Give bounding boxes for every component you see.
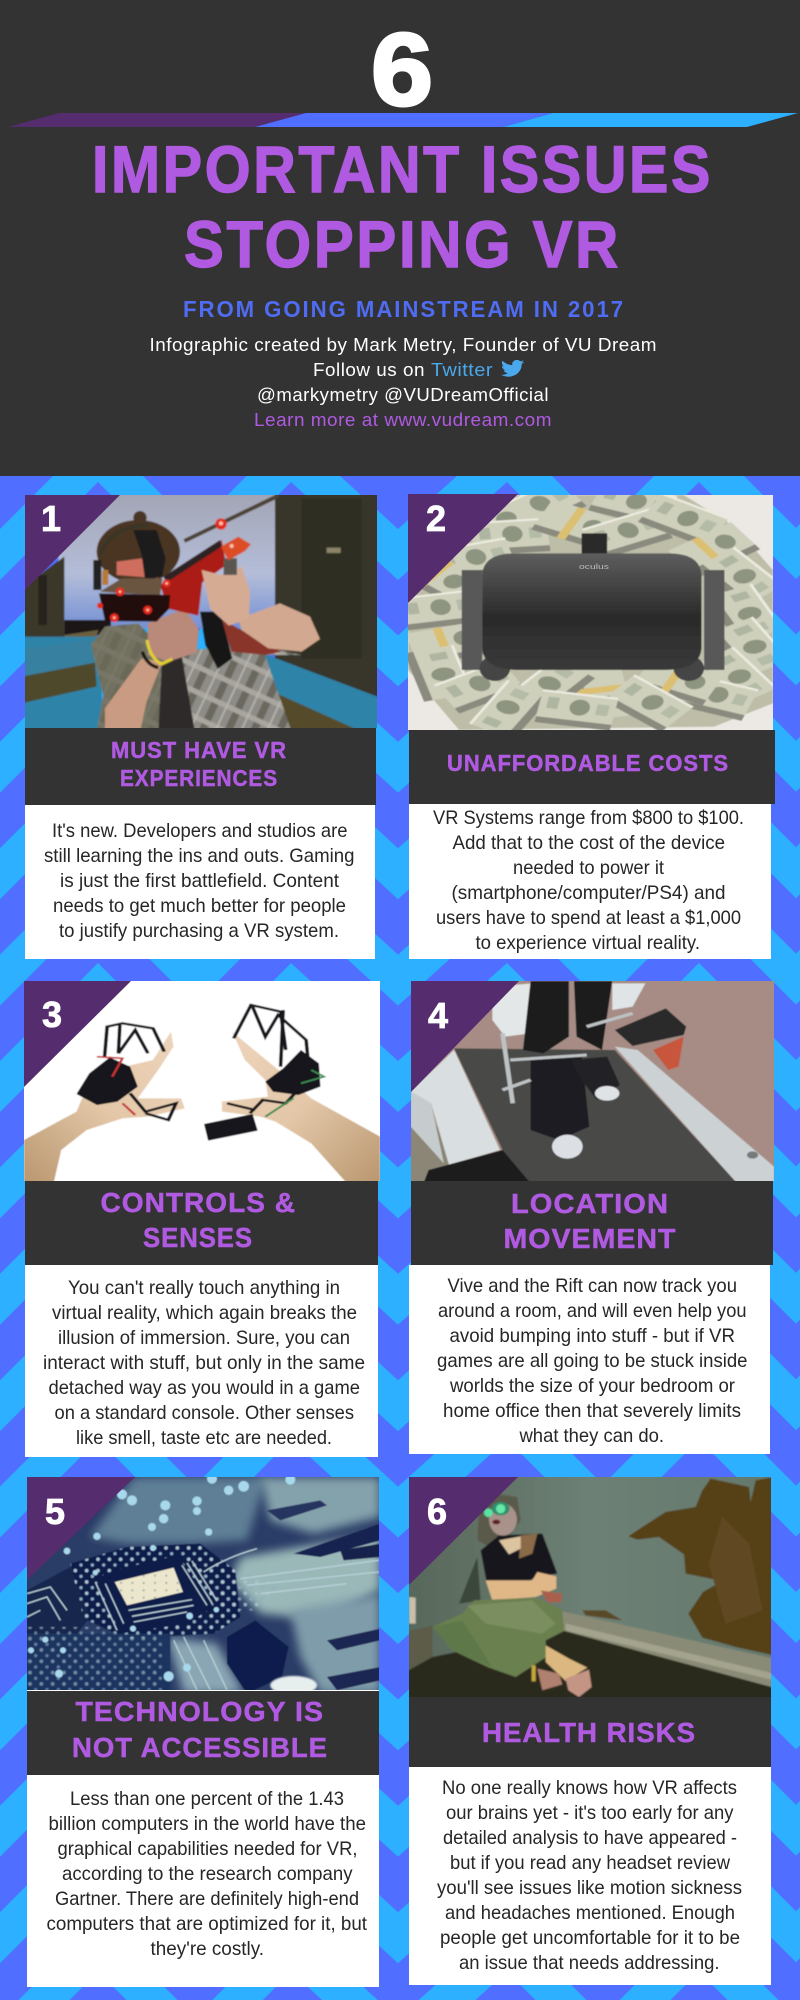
text block 5: Less than one percent of the 1.43 [70, 1788, 344, 1810]
heading band 2: UNAFFORDABLE COSTS [447, 750, 729, 776]
credits: Infographic created by Mark Metry, Founder of VU Dream [150, 334, 657, 355]
title: STOPPING VR [184, 207, 621, 281]
photo: player with VR gun [22, 492, 382, 733]
text block 1: still learning the ins and outs. Gaming [44, 845, 354, 867]
heading band 4 [411, 1181, 773, 1265]
title [92, 132, 713, 281]
text block 1 [25, 805, 375, 959]
text block 4 [409, 1265, 770, 1454]
text block 5 [27, 1775, 379, 1987]
heading band 1 [25, 728, 376, 805]
heading band 1: MUST HAVE VR [111, 737, 287, 763]
text block 3: virtual reality, which again breaks the [52, 1302, 357, 1324]
panel: issue 1 [22, 492, 382, 959]
heading band 3 [25, 1181, 378, 1265]
credits: Twitter [431, 359, 493, 380]
panel: issue 6 [406, 1474, 776, 1985]
text block 4: Vive and the Rift can now track you [448, 1275, 737, 1297]
number corner 5: 5 [45, 1491, 65, 1532]
panel: issue 5 [24, 1474, 384, 1987]
heading band 2 [409, 730, 775, 804]
number corner 3: 3 [42, 994, 62, 1035]
photo: hands in exoskeleton gloves [20, 977, 388, 1183]
text block 2: Add that to the cost of the device [452, 832, 725, 854]
text block 6: our brains yet - it's too early for any [446, 1802, 734, 1824]
heading band 6: HEALTH RISKS [482, 1717, 696, 1748]
text block 1: is just the first battlefield. Content [60, 870, 340, 892]
panel: issue 4 [408, 977, 781, 1454]
photo: headset on pile of money [408, 495, 773, 730]
text block 2: to experience virtual reality. [476, 932, 700, 954]
credits: Learn more at www.vudream.com [254, 409, 552, 430]
text block 4: avoid bumping into stuff - but if VR [450, 1325, 735, 1347]
text block 5: graphical capabilities needed for VR, [58, 1838, 358, 1860]
text block 3: interact with stuff, but only in the same [43, 1352, 365, 1374]
text block 1: It's new. Developers and studios are [52, 820, 348, 842]
text block 1: needs to get much better for people [53, 895, 346, 917]
text block 4: what they can do. [519, 1425, 664, 1447]
photo: headset on pile of money: oculus [579, 564, 610, 571]
text block 5: Gartner. There are definitely high-end [55, 1888, 359, 1910]
text block 2: (smartphone/computer/PS4) and [452, 882, 726, 904]
heading band 5: TECHNOLOGY IS [76, 1696, 324, 1727]
text block 5: billion computers in the world have the [48, 1813, 366, 1835]
text block 2: users have to spend at least a $1,000 [436, 907, 741, 929]
text block 6: you'll see issues like motion sickness [437, 1877, 742, 1899]
text block 1: to justify purchasing a VR system. [59, 920, 339, 942]
text block 3: like smell, taste etc are needed. [76, 1427, 332, 1449]
heading band 3: SENSES [143, 1222, 253, 1253]
text block 3: on a standard console. Other senses [54, 1402, 354, 1424]
text block 2 [409, 804, 771, 959]
text block 6 [409, 1767, 771, 1985]
text block 4: home office then that severely limits [443, 1400, 741, 1422]
text block 6: but if you read any headset review [450, 1852, 731, 1874]
number corner 6 [409, 1477, 518, 1585]
number corner 4: 4 [428, 995, 448, 1036]
number corner 5 [27, 1477, 135, 1580]
number corner 4 [411, 981, 519, 1092]
text block 3 [25, 1265, 378, 1457]
text block 6: detailed analysis to have appeared - [443, 1827, 737, 1849]
number corner 2: 2 [426, 498, 446, 539]
text block 4: worlds the size of your bedroom or [449, 1375, 735, 1397]
text block 3: You can't really touch anything in [68, 1277, 340, 1299]
text block 5: according to the research company [62, 1863, 353, 1885]
header panel [8, 12, 798, 430]
number corner 2 [408, 494, 518, 603]
heading band 5 [27, 1690, 379, 1775]
photo: circuit board close-up [24, 1474, 384, 1695]
text block 6: and headaches mentioned. Enough [445, 1902, 735, 1924]
big number 6: 6 [371, 12, 433, 127]
text block 5: they're costly. [150, 1938, 264, 1960]
heading band 3: CONTROLS & [100, 1187, 296, 1218]
text block 5: computers that are optimized for it, but [46, 1913, 368, 1935]
heading band 4: LOCATION [511, 1188, 669, 1219]
number corner 1: 1 [41, 498, 61, 539]
photo: legs in treadmill rig [408, 977, 781, 1183]
heading band 6 [409, 1697, 771, 1767]
text block 6: people get uncomfortable for it to be [440, 1927, 740, 1949]
number corner 1 [25, 495, 120, 590]
credits: Follow us on [313, 359, 425, 380]
photo: person in VR goggles against a wall [406, 1474, 776, 1700]
text block 6: No one really knows how VR affects [442, 1777, 737, 1799]
text block 3: detached way as you would in a game [48, 1377, 360, 1399]
credits [150, 334, 657, 430]
heading band 5: NOT ACCESSIBLE [72, 1732, 328, 1763]
panel: issue 2 [408, 494, 775, 959]
text block 4: around a room, and will even help you [438, 1300, 746, 1322]
icon: twitter bird [501, 360, 524, 377]
credits: @markymetry @VUDreamOfficial [257, 384, 549, 405]
text block 2: VR Systems range from $800 to $100. [433, 807, 744, 829]
panel: issue 3 [20, 977, 388, 1457]
number corner 3 [24, 981, 131, 1087]
text block 6: an issue that needs addressing. [459, 1952, 720, 1974]
number corner 6: 6 [427, 1491, 447, 1532]
heading band 1: EXPERIENCES [120, 765, 278, 791]
heading band 4: MOVEMENT [504, 1223, 676, 1254]
text block 3: illusion of immersion. Sure, you can [58, 1327, 350, 1349]
title: IMPORTANT ISSUES [92, 132, 713, 206]
text block 4: games are all going to be stuck inside [437, 1350, 748, 1372]
subtitle: FROM GOING MAINSTREAM IN 2017 [183, 296, 625, 322]
text block 2: needed to power it [513, 857, 665, 879]
tricolour slanted stripe [8, 113, 798, 127]
